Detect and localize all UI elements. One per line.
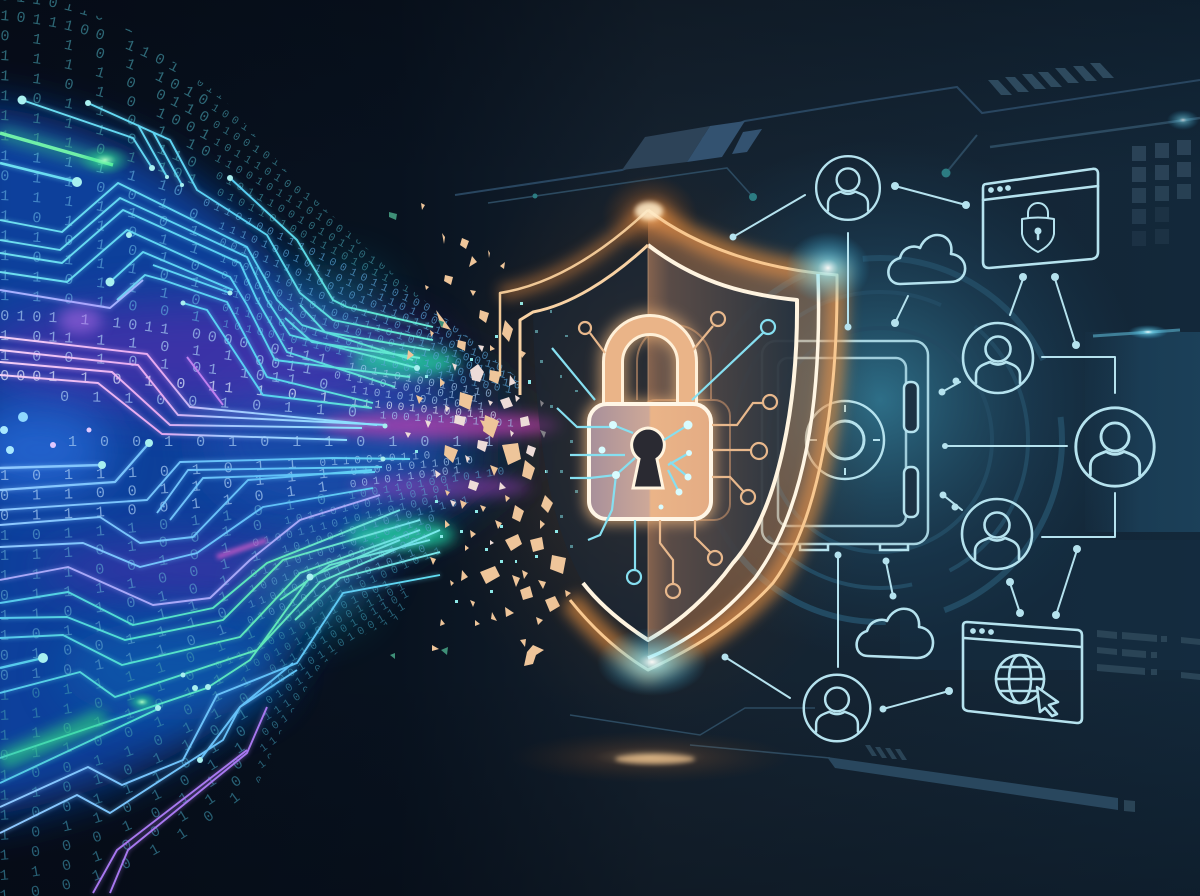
lock glow bbox=[585, 401, 714, 523]
binary rows: middle: 1 0 1 1 1 0 1 0 1 1 0110010110 bbox=[1, 451, 430, 480]
user icons bbox=[804, 156, 1154, 741]
safe dial bbox=[806, 401, 884, 479]
shield bbox=[500, 175, 870, 696]
binary rows: upper fan: 1 1 1 1 0 01100100101101011101001011010011 bbox=[1, 50, 286, 172]
connector lines bbox=[725, 186, 1115, 709]
cyan specks bbox=[415, 302, 578, 603]
browser window with lock bbox=[983, 169, 1098, 268]
binary digits bbox=[0, 0, 518, 896]
binary digits: 0 1 1 0 0 1 0 1 1 01110100101101 bbox=[0, 590, 409, 760]
binary rows: lower fan: 1 1 1 0 1 0 0 1 0 101101001110101 bbox=[1, 484, 450, 560]
shield halo bbox=[500, 175, 837, 670]
peach shards bbox=[407, 203, 571, 666]
binary rows: middle: 0001 1 0 1 0 11 1 0 1 1110010100110 bbox=[1, 370, 496, 419]
ghost lock bbox=[637, 325, 730, 520]
binary rows: lower fan: 0 1 1 1 1 0 0 1 1 10100101101011101 bbox=[0, 496, 468, 600]
shattered fragments bbox=[389, 203, 578, 666]
shackle bbox=[613, 325, 687, 408]
binary rows: upper fan: 0 1 1 0 1 10101001101011010010111010110100 bbox=[1, 30, 256, 138]
lower purple traces bbox=[93, 707, 267, 893]
binary digits: 1 0 0 1 1 1 0 1 0 11100101101001 bbox=[0, 686, 308, 820]
shield sparkle highlights bbox=[597, 202, 870, 696]
square grid bbox=[1132, 140, 1191, 246]
keyhole bbox=[632, 428, 664, 488]
binary rows: middle: 0101 1 1011 0000 0111 1011010010110 bbox=[1, 310, 492, 397]
binary digits: 0 1 1 0 0 1 0 1110100101101011101001011010 bbox=[1, 170, 468, 338]
dashed parallelogram marks bbox=[988, 63, 1114, 95]
binary digits: 1 1 0 1 0 0 1 1 0 10010111010010 bbox=[0, 663, 392, 885]
binary digits: 1 1 0 1 1 0 1 1 1001011010011101 bbox=[0, 584, 405, 740]
binary rows: lower fan: 1 1 0 1 0 1 0 1 01110100101100110 bbox=[1, 514, 434, 620]
lock body bbox=[589, 404, 711, 519]
binary rows: lower fan bbox=[0, 467, 504, 680]
binary rows: upper fan: 1 1 1 0 1 101 0101101001110101101001011101 bbox=[1, 130, 426, 302]
lock nodes bbox=[598, 420, 692, 510]
binary rows: upper fan: 1011100 1101 0110100101110100111011010010 bbox=[1, 10, 228, 104]
floor glow bbox=[510, 731, 790, 783]
padlock bbox=[552, 312, 777, 598]
binary rows: middle: 1 011 1 1 0 1 1 0011 0111010010111 bbox=[1, 330, 478, 402]
cloud lower bbox=[857, 609, 933, 658]
binary digits: 1 0 1 1 0 1 1 1001010110100111010010110101 bbox=[1, 210, 498, 364]
background tech lines and panels bbox=[455, 80, 1200, 812]
binary rows: middle: 0 1 1 0 0 1 1 0 1 1 1 01001011010 bbox=[1, 456, 472, 500]
purple left trace bbox=[0, 280, 143, 308]
light accents bbox=[1128, 110, 1199, 339]
binary rows: lower fan: 0 1 0 0 1 1 1 0 11010010110101001 bbox=[0, 534, 428, 660]
binary digits: 1 0 0 1 1 0 1 1 0 10010110100111 bbox=[0, 603, 405, 780]
binary digits: 1 0 0 0 1 0 1 1 0 11010010110100 bbox=[0, 649, 396, 865]
binary rows: lower fan: 1 0 1 1 0 1 1 1 10010110100111010 bbox=[0, 524, 432, 640]
shield outlines bbox=[500, 210, 837, 670]
network diagram bbox=[722, 156, 1154, 741]
binary digits: 1 1 0 1 0 1 1 0 1 01011010010111 bbox=[0, 616, 398, 800]
binary rows: lower fan: 0 1 0 1 1 1 0 1 01001011101010110 bbox=[0, 544, 425, 680]
data stream glow band bbox=[0, 105, 560, 820]
binary digits: 1 1 1 1 1 10 0110100111010010110100111010 bbox=[1, 150, 449, 321]
central cyan lines bbox=[0, 442, 410, 567]
shield interior bbox=[648, 245, 797, 640]
green and cyan glow streaks bbox=[0, 133, 267, 762]
binary digits: 1 0 1 1 0 1 0 1 1 00101101011101 bbox=[0, 636, 400, 845]
binary rows: lower fan: 1 1 1 0 0 1 0 1 01001110101101001 bbox=[1, 494, 440, 580]
cloud upper bbox=[888, 235, 965, 284]
binary rows: upper fan: 1 0 1 1 0 1 101100101110100101011011101001 bbox=[1, 90, 369, 250]
green shards bbox=[389, 212, 448, 659]
upper cyan bundle bbox=[0, 100, 433, 408]
connector nodes bbox=[722, 182, 1081, 712]
binary rows: middle: 0 1 1 0 0 1 0 1 1 0 100101101001 bbox=[61, 390, 514, 427]
lock circuits bbox=[552, 312, 777, 598]
binary digits: 1 0 1 1 1 1 0 1 1 1010011101001011 bbox=[1, 548, 442, 700]
pale shards bbox=[405, 345, 546, 545]
binary rows: upper fan: 1 1 0 1 0 10011011101001011010011101011010 bbox=[1, 70, 336, 218]
binary rows: lower fan: 1 0 1 1 1 0 1 1 0 1 0 10011010010110 bbox=[1, 467, 504, 540]
circuit nodes bbox=[0, 96, 420, 763]
browser window with globe bbox=[963, 622, 1082, 723]
lower cyan-green bundles bbox=[0, 495, 440, 783]
circuit line bundles bbox=[0, 100, 440, 893]
binary digits: 1 1 1 1 1 0 1 0010111010010101101110100101 bbox=[1, 190, 481, 350]
binary digits: 1 1 1 0 1 1 0 01101001011101001 bbox=[0, 580, 390, 720]
binary rows: middle: 1 0 0 1 0 1 01 1011 0 110101001011 bbox=[1, 350, 484, 410]
binary rows: middle bbox=[1, 310, 514, 520]
safe bbox=[762, 341, 928, 550]
circuit line glow bbox=[0, 100, 440, 893]
pink and white centre lines bbox=[0, 337, 387, 440]
binary rows: middle: 0 1 1 1 0 0 1 1 0 1 1 0010110101 bbox=[1, 466, 460, 520]
binary rows: upper fan: 1 1 1 1 0 110 0101110010101101001110100101 bbox=[1, 110, 394, 274]
